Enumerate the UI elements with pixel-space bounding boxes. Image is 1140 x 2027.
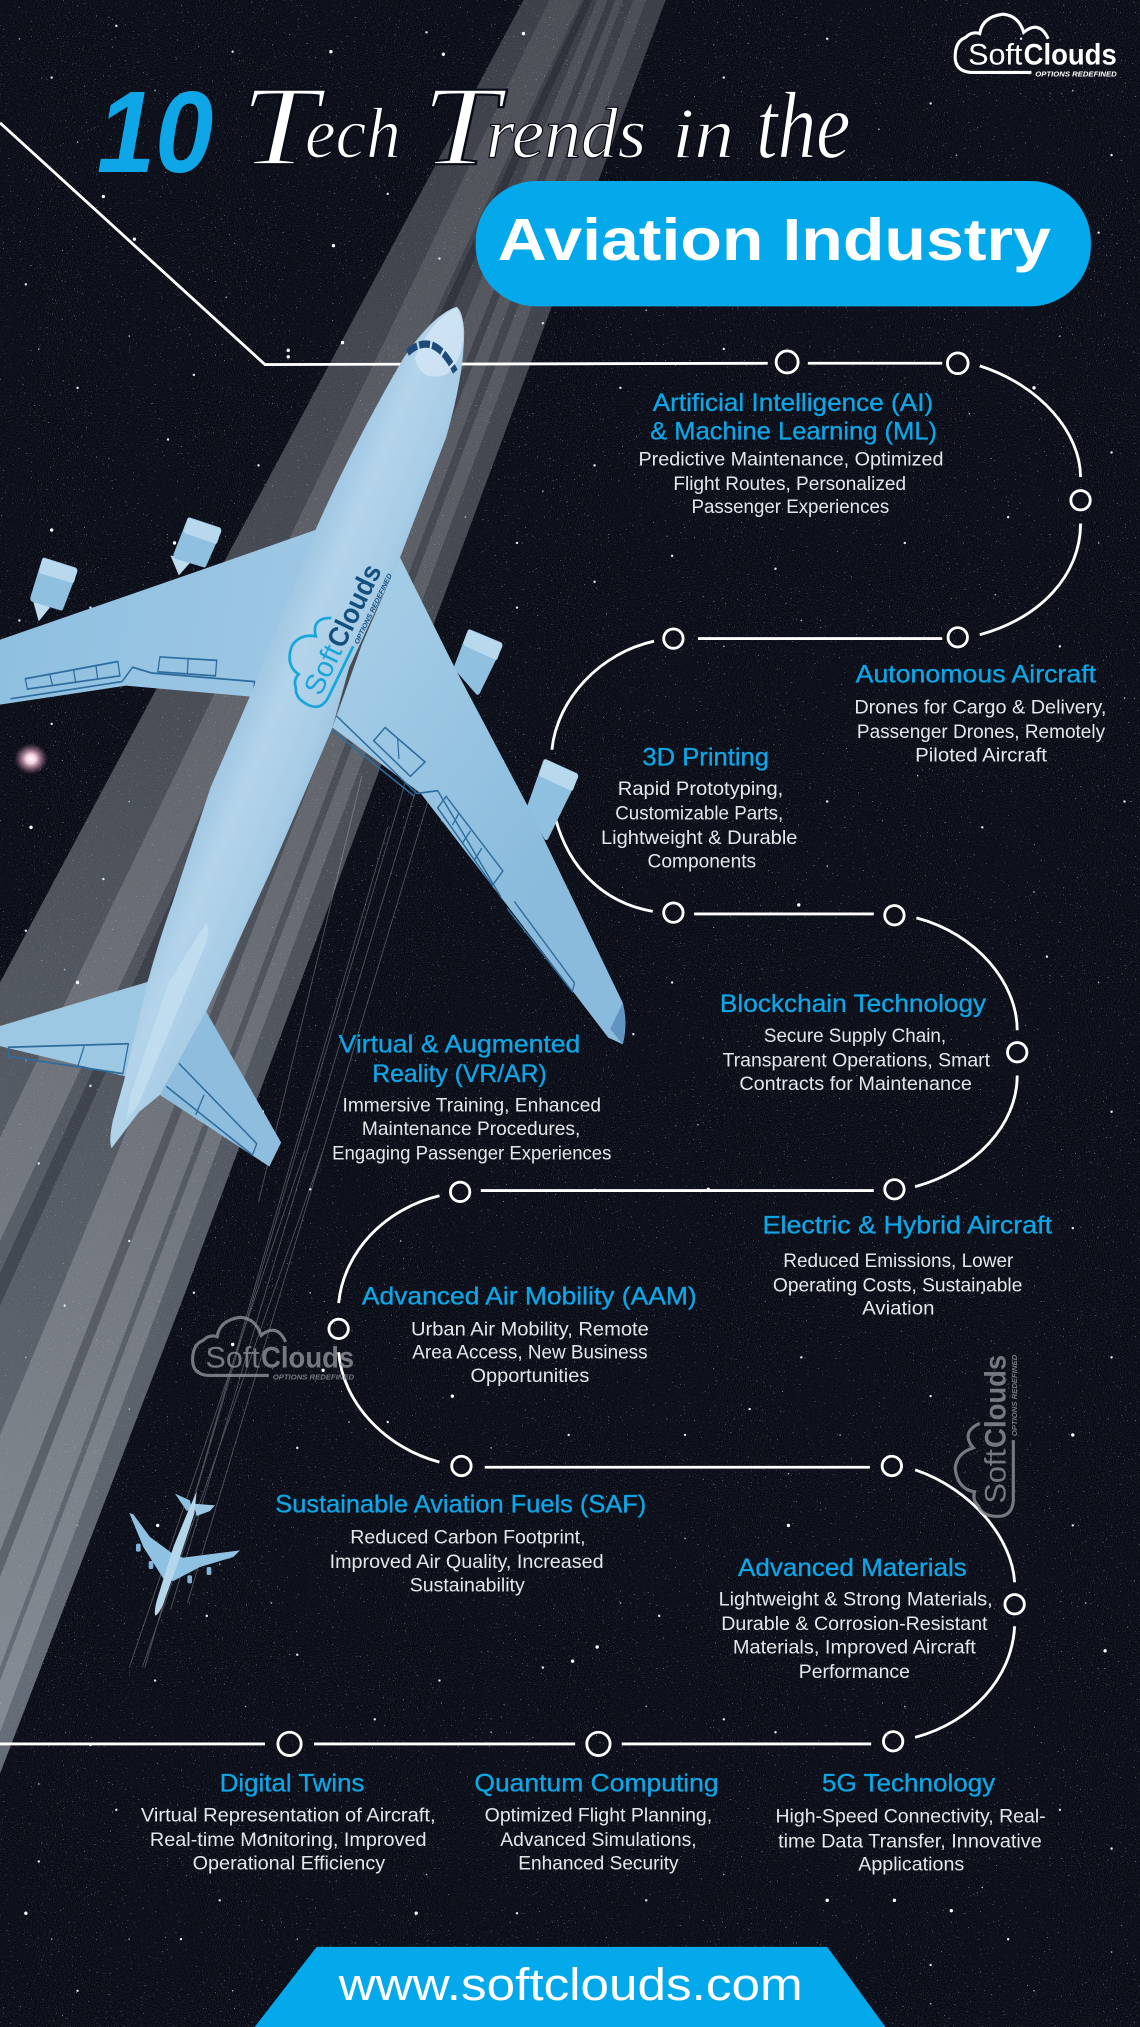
logo on fuselage: Clouds: [320, 559, 387, 652]
logo top right: Soft: [968, 39, 1023, 72]
logo on fuselage: [272, 549, 394, 714]
watermark logo right rotated: Clouds: [980, 1355, 1013, 1448]
title: 10 Tech Trends in the: 10: [97, 67, 213, 197]
trend: Artificial Intelligence and Machine Learning: & Machine Learning (ML): [650, 419, 937, 446]
path connecting the ten trends: [0, 123, 1090, 1756]
title: 10 Tech Trends in the: [97, 63, 850, 197]
trend: Quantum Computing: Optimized Flight Planning,: [485, 1804, 712, 1826]
trend: Electric and Hybrid Aircraft: Aviation: [862, 1298, 934, 1320]
nebula glow star: [14, 743, 48, 774]
right tailplane: [160, 1012, 281, 1167]
trend: 5G Technology: Applications: [858, 1854, 964, 1876]
trend: Advanced Materials: Advanced Materials: [738, 1555, 967, 1582]
trend: Electric and Hybrid Aircraft: Electric & Hybrid Aircraft: [763, 1212, 1052, 1239]
trend: Sustainable Aviation Fuels: Reduced Carbon Footprint,: [350, 1527, 586, 1549]
trend: Virtual and Augmented Reality: Virtual & Augmented: [339, 1031, 580, 1058]
logo on fuselage: Soft: [297, 639, 348, 700]
trend: 3D Printing: [601, 744, 797, 872]
trend: Electric and Hybrid Aircraft: [763, 1212, 1052, 1320]
right wing: [332, 557, 625, 1044]
logo top right: [955, 14, 1117, 78]
title: 10 Tech Trends in the: ech: [305, 94, 401, 174]
trend: Blockchain Technology: Transparent Operations, Smart: [723, 1050, 991, 1072]
subtitle pill: Aviation Industry: [476, 181, 1091, 306]
engine: right inner: [457, 633, 500, 691]
footer banner with website: [255, 1947, 885, 2027]
trend: Sustainable Aviation Fuels: Improved Air Quality, Increased: [330, 1551, 604, 1573]
trend: 5G Technology: time Data Transfer, Innovative: [778, 1830, 1042, 1852]
trend: Sustainable Aviation Fuels: Sustainability: [410, 1574, 525, 1596]
trend: Artificial Intelligence and Machine Learning: Predictive Maintenance, Optimized: [639, 448, 944, 470]
trend: Electric and Hybrid Aircraft: Reduced Emissions, Lower: [783, 1250, 1014, 1272]
trend: 3D Printing: Components: [648, 850, 756, 872]
trend: Virtual and Augmented Reality: Maintenance Procedures,: [362, 1118, 580, 1140]
trend: Blockchain Technology: [720, 991, 991, 1095]
trend: 5G Technology: High-Speed Connectivity, Real-: [776, 1806, 1046, 1828]
trend: 5G Technology: 5G Technology: [822, 1771, 996, 1798]
left tailplane: [0, 982, 148, 1076]
fuselage: [110, 307, 464, 1148]
trend: Advanced Air Mobility: Urban Air Mobility, Remote: [411, 1318, 649, 1340]
title: 10 Tech Trends in the: T: [421, 63, 507, 189]
title: 10 Tech Trends in the: in: [672, 94, 734, 174]
trend: Advanced Air Mobility: Area Access, New Business: [412, 1342, 648, 1364]
title: 10 Tech Trends in the: the: [756, 73, 850, 179]
watermark logo left: OPTIONS REDEFINED: [273, 1373, 354, 1381]
watermark logo right rotated: OPTIONS REDEFINED: [1011, 1355, 1019, 1436]
watermark logo left: Clouds: [261, 1342, 354, 1375]
trend: Artificial Intelligence and Machine Learning: Artificial Intelligence (AI): [653, 390, 933, 417]
trend: Quantum Computing: [474, 1771, 719, 1874]
trend: Advanced Air Mobility: [362, 1283, 697, 1387]
title: 10 Tech Trends in the: T: [240, 63, 326, 189]
trend: 3D Printing: Customizable Parts,: [615, 803, 783, 825]
trend: Digital Twins: [141, 1771, 436, 1874]
watermark logo right rotated: [955, 1355, 1019, 1516]
trend: Virtual and Augmented Reality: Immersive Training, Enhanced: [343, 1095, 601, 1117]
footer banner with website: www.softclouds.com: [338, 1959, 803, 2010]
trend: 3D Printing: Rapid Prototyping,: [618, 778, 783, 800]
main airplane: [0, 307, 625, 1167]
trend: Blockchain Technology: Blockchain Technology: [720, 991, 987, 1018]
trend: Digital Twins: Real-time Monitoring, Improved: [150, 1829, 427, 1851]
watermark logo left: [193, 1317, 354, 1381]
trend: Sustainable Aviation Fuels: [275, 1491, 646, 1596]
logo top right: Clouds: [1024, 39, 1117, 72]
trend: Advanced Materials: Materials, Improved Aircraft: [733, 1636, 976, 1658]
trend: Artificial Intelligence and Machine Learning: Flight Routes, Personalized: [673, 473, 906, 495]
trend: Autonomous Aircraft: [854, 662, 1106, 766]
trend: Advanced Air Mobility: Opportunities: [470, 1365, 589, 1387]
watermark logo right rotated: Soft: [980, 1448, 1013, 1503]
engine: right outer: [529, 763, 576, 837]
trend: Advanced Materials: Lightweight & Strong Materials,: [719, 1589, 993, 1611]
trend: Advanced Materials: [719, 1555, 993, 1683]
trend: Blockchain Technology: Contracts for Maintenance: [739, 1073, 972, 1095]
engine: left inner: [170, 521, 219, 575]
logo on fuselage: OPTIONS REDEFINED: [354, 573, 394, 645]
trend: Advanced Air Mobility: Advanced Air Mobility (AAM): [362, 1283, 697, 1310]
trend: Quantum Computing: Quantum Computing: [474, 1771, 719, 1798]
trend: Advanced Materials: Performance: [799, 1661, 910, 1683]
engine: left outer: [32, 561, 75, 621]
left wing: [0, 528, 320, 705]
trend: Autonomous Aircraft: Autonomous Aircraft: [856, 662, 1096, 689]
trend: Autonomous Aircraft: Piloted Aircraft: [915, 744, 1048, 766]
trend: Digital Twins: Digital Twins: [220, 1771, 364, 1798]
small plane in distance: [129, 1492, 240, 1615]
contrail bands: [0, 0, 666, 1774]
trend: 3D Printing: Lightweight & Durable: [601, 827, 797, 849]
subtitle pill: Aviation Industry: Aviation Industry: [498, 206, 1051, 273]
trend: Sustainable Aviation Fuels: Sustainable Aviation Fuels (SAF): [275, 1491, 646, 1518]
trend: Artificial Intelligence and Machine Learning: Passenger Experiences: [691, 496, 889, 518]
trend: Digital Twins: Operational Efficiency: [193, 1852, 385, 1874]
watermark logo left: Soft: [206, 1342, 261, 1375]
trend: Blockchain Technology: Secure Supply Chain,: [764, 1025, 946, 1047]
trend: Advanced Materials: Durable & Corrosion-Resistant: [721, 1613, 988, 1635]
logo top right: OPTIONS REDEFINED: [1035, 70, 1117, 78]
trend: Electric and Hybrid Aircraft: Operating Costs, Sustainable: [773, 1274, 1022, 1296]
trend: Autonomous Aircraft: Passenger Drones, Remotely: [857, 721, 1105, 743]
trend: Autonomous Aircraft: Drones for Cargo & Delivery,: [854, 697, 1106, 719]
trend: Quantum Computing: Advanced Simulations,: [500, 1829, 697, 1851]
trend: 5G Technology: [776, 1771, 1046, 1876]
trend: Virtual and Augmented Reality: [332, 1031, 611, 1165]
trend: 3D Printing: 3D Printing: [642, 744, 769, 771]
trend: Quantum Computing: Enhanced Security: [518, 1852, 679, 1874]
trend: Artificial Intelligence and Machine Learning: [639, 390, 944, 518]
trend: Digital Twins: Virtual Representation of Aircraft,: [141, 1804, 436, 1826]
trend: Virtual and Augmented Reality: Engaging Passenger Experiences: [332, 1143, 611, 1165]
title: 10 Tech Trends in the: rends: [486, 94, 646, 174]
trend: Virtual and Augmented Reality: Reality (VR/AR): [372, 1061, 547, 1088]
